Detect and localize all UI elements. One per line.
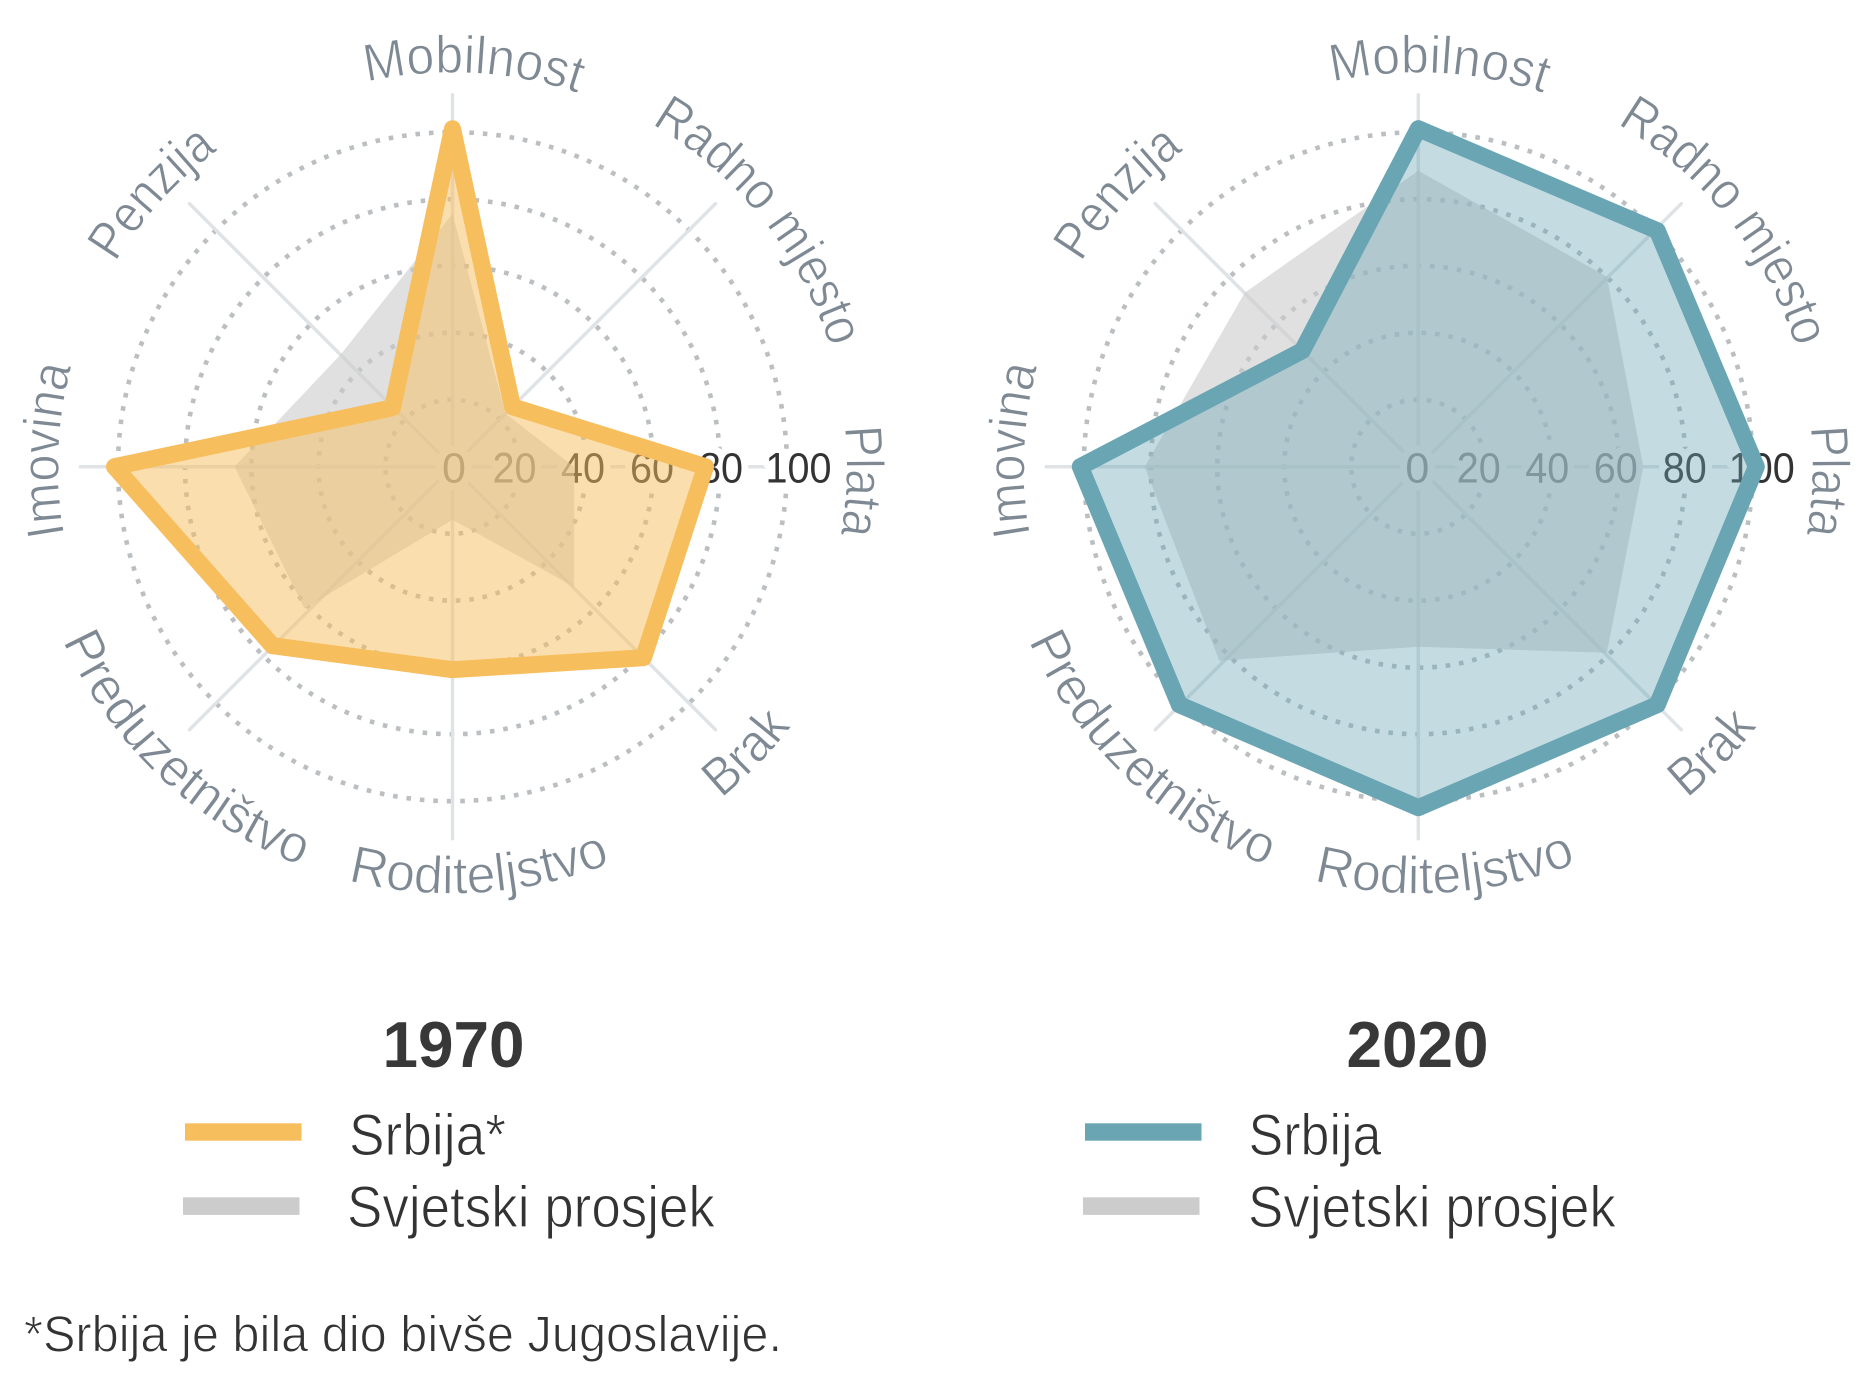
legend swatch: world average 2020 xyxy=(1083,1197,1200,1215)
axis labels: Radno mjesto xyxy=(655,96,854,342)
axis labels: Imovina xyxy=(988,366,1036,536)
scale labels: 100 xyxy=(766,445,832,493)
legend swatch: Serbia 2020 xyxy=(1085,1123,1202,1141)
radar chart: 2020 xyxy=(988,34,1850,900)
axis labels: Preduzetništvo xyxy=(64,629,306,862)
grid rings xyxy=(1084,132,1753,801)
grid spokes xyxy=(80,95,824,839)
legend label: world average 1970: Svjetski prosjek xyxy=(347,1175,716,1240)
footnote: *Srbija je bila dio bivše Jugoslavije. xyxy=(24,1306,782,1363)
scale labels: 40 xyxy=(1525,445,1569,493)
legend: 1970 xyxy=(183,1103,716,1240)
grid rings xyxy=(118,132,787,801)
Serbia outline 1970 xyxy=(114,129,706,670)
axis labels: Brak xyxy=(701,710,791,796)
axis labels: Penzija xyxy=(1053,134,1183,259)
axis labels xyxy=(988,34,1850,900)
scale labels: 0 xyxy=(442,445,466,493)
world average area 1970 xyxy=(234,214,574,609)
heading: 2020: 2020 xyxy=(1346,1008,1488,1081)
Serbia area 2020 xyxy=(1080,129,1756,808)
scale labels: 60 xyxy=(630,445,674,493)
scale labels: 100 xyxy=(1729,445,1795,493)
scale labels: 60 xyxy=(1594,445,1638,493)
axis labels: Plata xyxy=(1807,428,1850,534)
heading: 1970: 1970 xyxy=(382,1008,524,1081)
grid spokes xyxy=(1046,95,1790,839)
axis labels: Roditeljstvo xyxy=(1318,840,1571,900)
axis labels: Penzija xyxy=(88,134,218,259)
axis labels: Imovina xyxy=(22,366,71,536)
axis labels: Brak xyxy=(1666,710,1757,796)
axis labels xyxy=(22,34,884,900)
legend label: world average 2020: Svjetski prosjek xyxy=(1248,1175,1617,1240)
legend swatch: world average 1970 xyxy=(183,1197,300,1215)
axis labels: Radno mjesto xyxy=(1621,96,1819,342)
scale labels: 40 xyxy=(561,445,605,493)
axis labels: Plata xyxy=(841,428,884,534)
axis labels: Roditeljstvo xyxy=(352,840,606,900)
scale labels: 0 xyxy=(1405,445,1429,493)
axis labels: Mobilnost xyxy=(365,34,585,92)
scale labels: 20 xyxy=(1457,445,1501,493)
legend: 2020 xyxy=(1083,1103,1617,1240)
legend label: Srbija: Srbija xyxy=(1248,1103,1382,1168)
scale labels: 20 xyxy=(492,445,536,493)
world average area 2020 xyxy=(1145,171,1643,661)
legend label: Srbija*: Srbija* xyxy=(349,1103,506,1168)
scale labels xyxy=(1405,445,1795,493)
Serbia outline 2020 xyxy=(1080,129,1756,808)
radar chart: 1970 xyxy=(22,34,884,900)
axis labels: Preduzetništvo xyxy=(1030,629,1272,862)
scale labels: 80 xyxy=(699,445,743,493)
scale labels: 80 xyxy=(1663,445,1707,493)
axis labels: Mobilnost xyxy=(1330,34,1551,92)
legend swatch: Serbia 1970 xyxy=(185,1123,302,1141)
scale labels xyxy=(442,445,832,493)
Serbia area 1970 xyxy=(114,129,706,670)
